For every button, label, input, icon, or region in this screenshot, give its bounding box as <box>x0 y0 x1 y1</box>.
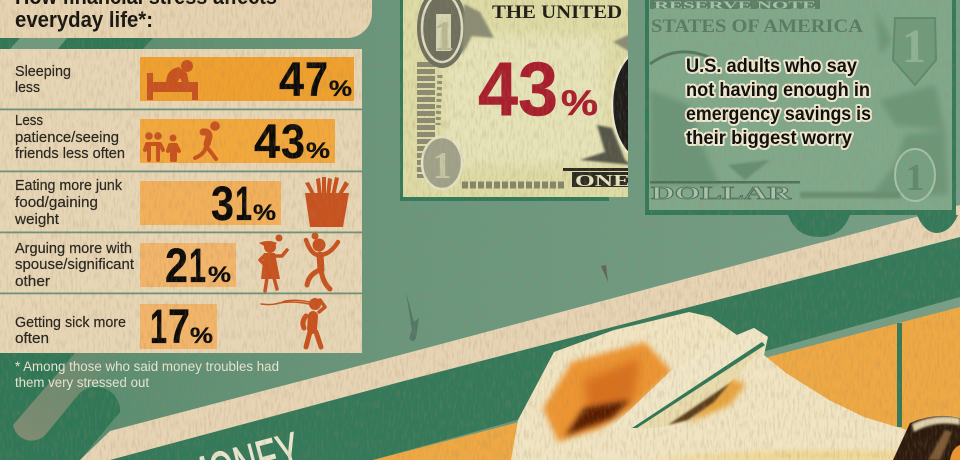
row: less patience <box>15 112 335 169</box>
stains on wall <box>406 265 608 341</box>
icon: sick person with scarf <box>261 298 325 347</box>
bill lettering: THE UNITED <box>492 2 622 23</box>
ONE plate: ONE <box>575 171 630 190</box>
engraving: portrait <box>650 52 770 185</box>
row: arguing: 2 <box>165 240 188 293</box>
row: sleeping less: 4 <box>279 54 304 107</box>
row: arguing: Arguing more with <box>15 240 132 257</box>
warm glow at hand bottom <box>640 451 900 460</box>
row: junk food: food/gaining <box>15 194 98 211</box>
row: less patience: Less <box>15 112 43 129</box>
row: getting sick: 7 <box>168 301 190 354</box>
finger over pen <box>611 328 768 428</box>
row: junk food <box>14 177 349 231</box>
footnote: them very stressed out <box>15 375 149 390</box>
row: sleeping less <box>15 54 354 107</box>
engraving: lower numeral oval: 1 <box>906 157 924 199</box>
icon: french fries <box>305 177 349 227</box>
row: junk food: weight <box>14 211 60 228</box>
scalloped tabs under bill <box>788 215 958 237</box>
engraving: right numeral shield <box>870 10 948 197</box>
row: getting sick: 1 <box>150 301 167 354</box>
portrait oval <box>580 34 628 166</box>
heading: everyday life*: <box>15 7 153 32</box>
engraving: dollar plate: DOLLAR <box>651 183 793 203</box>
pen green stripe <box>632 342 765 428</box>
engraving: lower numeral oval <box>895 149 935 201</box>
row: sleeping less: less <box>15 79 40 96</box>
footnote: * Among those who said money troubles had <box>15 359 279 374</box>
engraving: lower-left numeral oval: 1 <box>432 145 452 187</box>
row: sleeping less: Sleeping <box>15 63 71 80</box>
bill lettering: STATES OF AMERICA <box>651 16 863 37</box>
row: less patience: patience/seeing <box>15 129 119 146</box>
row: arguing: % <box>208 262 231 287</box>
vertical green rule <box>897 323 902 427</box>
row: junk food: 1 <box>235 178 252 231</box>
caption: U.S. adults who say <box>686 56 857 77</box>
row: junk food: % <box>253 200 276 225</box>
big statistic: 43 <box>478 47 558 132</box>
decorative capsule: lighter strip <box>13 353 125 441</box>
icon: person awake on bed <box>147 60 198 100</box>
row: junk food: Eating more junk <box>15 177 122 194</box>
row: arguing <box>15 232 338 293</box>
row: less patience: % <box>306 138 330 163</box>
pen shaft <box>634 345 764 428</box>
orange shading between fingers <box>543 342 672 442</box>
icon: arguing couple <box>259 232 338 291</box>
big statistic: % <box>561 84 598 123</box>
dark green lower-left shape with capsule <box>0 353 120 460</box>
diagonal band: dark green <box>110 237 960 460</box>
row: arguing: spouse/significant <box>15 256 135 273</box>
illustration: hand writing with pen <box>511 312 907 460</box>
panel: dollar bill with caption <box>645 0 956 215</box>
row: less patience: friends less often <box>15 145 125 162</box>
row: getting sick: % <box>190 323 213 348</box>
engraving: upper-left numeral oval <box>417 0 494 68</box>
row: getting sick: Getting sick more <box>15 314 126 331</box>
illustration: shirt cuff <box>893 416 960 460</box>
icon: friends and stooped person <box>145 121 220 160</box>
striped divider band <box>0 38 153 49</box>
row: sleeping less: % <box>329 76 352 101</box>
engraving: reserve note plate <box>650 0 820 9</box>
row: arguing: 1 <box>189 240 206 293</box>
engraving: bottom border <box>462 182 565 188</box>
diagonal band: cream <box>80 205 960 460</box>
engraving: left border foliage <box>426 62 440 178</box>
caption: emergency savings is <box>686 104 871 125</box>
ONE plate <box>563 168 628 187</box>
row: getting sick: often <box>15 330 49 347</box>
engraving: reserve note plate: RESERVE NOTE <box>654 0 817 12</box>
row: junk food: 3 <box>211 178 234 231</box>
caption: their biggest worry <box>686 128 852 149</box>
caption: not having enough in <box>686 80 870 101</box>
engraving: right numeral shield: 1 <box>902 20 926 73</box>
diagonal band: orange field <box>373 307 960 460</box>
row: less patience: 4 <box>254 116 280 169</box>
row: less patience: 3 <box>281 116 305 169</box>
panel: stress effects table <box>0 49 362 354</box>
row: getting sick <box>15 298 325 354</box>
engraving: lower-left numeral oval <box>422 137 462 189</box>
orange glow under pen <box>686 378 746 422</box>
row: arguing: other <box>15 273 50 290</box>
panel: dollar bill with 43% <box>400 0 628 201</box>
engraving: dollar plate <box>650 181 901 200</box>
row: sleeping less: 7 <box>305 54 328 107</box>
header panel <box>0 0 372 38</box>
engraving: upper-left numeral oval: 1 <box>434 14 454 60</box>
